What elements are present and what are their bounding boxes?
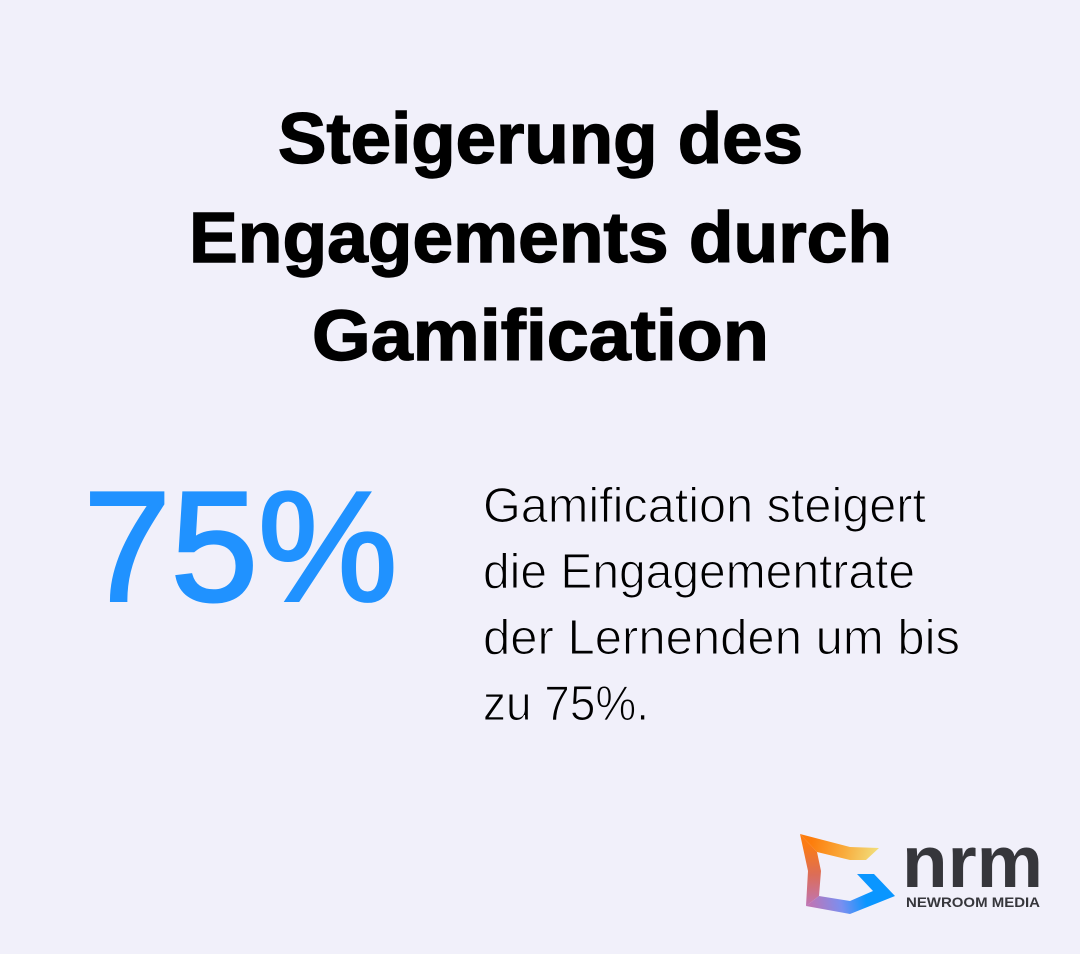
- big number: 75%: 75%: [84, 460, 398, 634]
- title: Engagements durch: [189, 199, 892, 278]
- description text: der Lernenden um bis: [483, 611, 960, 665]
- title: Gamification: [312, 297, 769, 376]
- description text: Gamification steigert: [483, 479, 926, 533]
- description text: [483, 479, 960, 731]
- wordmark: newroom media: NEWROOM MEDIA: [906, 894, 1040, 910]
- logo: newroom media: [800, 822, 1043, 914]
- description text: zu 75%.: [483, 677, 649, 731]
- title: [189, 100, 892, 376]
- title: Steigerung des: [278, 100, 803, 179]
- description text: die Engagementrate: [483, 545, 915, 599]
- wordmark: nrm: nrm: [902, 822, 1043, 903]
- icon: logo mark: [800, 834, 895, 914]
